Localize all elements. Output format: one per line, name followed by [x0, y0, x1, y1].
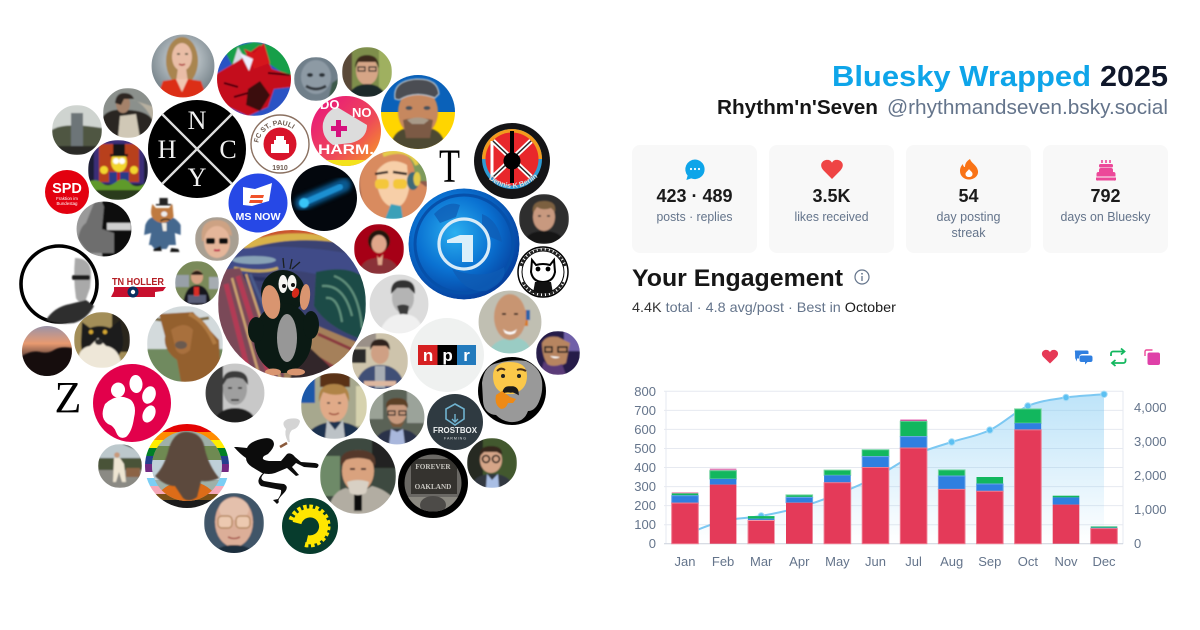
avatar: anime portrait [359, 150, 429, 219]
avatar: Frostbox farming logo: FROSTBOX [433, 426, 478, 435]
avatar: man with glasses, forest [342, 47, 392, 97]
avatar: NPR logo [410, 318, 484, 392]
month labels: Mar [750, 554, 773, 569]
profile name and handle: Rhythm'n'Seven [717, 97, 878, 119]
avatar: bearded man, black and white [369, 274, 429, 334]
avatar: green party sunflower [282, 498, 338, 554]
avatar: reporter in blazer [352, 333, 408, 391]
right axis labels [1134, 400, 1167, 551]
month labels: Jan [675, 554, 695, 569]
right axis labels: 3,000 [1134, 434, 1167, 449]
avatar: laughing man with beard [320, 438, 398, 514]
profile name and handle [717, 97, 1168, 119]
avatar: SPD logo: Fraktion im [56, 196, 78, 201]
icon: fox in a suit [144, 198, 181, 252]
avatar: MS NOW logo [228, 174, 288, 232]
icon: quotes copy squares [1145, 350, 1160, 365]
profile name and handle: @rhythmandseven.bsky.social [887, 97, 1168, 119]
text avatar: T: T [439, 140, 460, 193]
avatar: SPD logo: SPD [52, 181, 82, 197]
avatar: Forever Oakland: OAKLAND [415, 483, 451, 491]
avatar cluster [19, 34, 580, 554]
avatar: simpsons character [88, 140, 148, 200]
bar: Nov [1053, 496, 1079, 544]
card: day posting streak: day posting [936, 210, 1001, 224]
card: posts and replies: posts · replies [656, 210, 732, 224]
avatar: NYHC logo [148, 100, 246, 198]
avatar: tagesschau globe [408, 188, 520, 300]
avatar: NYHC logo: H [158, 135, 177, 164]
avatar: man with cap, Ukrainian colours [381, 75, 455, 150]
avatar: do no harm mask: NO [352, 105, 372, 120]
avatar: Dennis K Berlin [474, 123, 550, 199]
icon: info [855, 270, 869, 284]
avatar: NPR logo: p [442, 346, 453, 365]
avatar: red paw logo [93, 364, 171, 442]
avatar: NYHC logo: N [188, 106, 207, 135]
left axis labels: 800 [634, 384, 656, 399]
bar: Mar [748, 516, 774, 544]
avatar: woman with sunglasses [195, 217, 239, 261]
chart grid [664, 391, 1123, 544]
avatar: blond woman [151, 34, 215, 98]
month labels: Jul [905, 554, 922, 569]
avatar: NYHC logo: C [219, 135, 237, 164]
month labels: Feb [712, 554, 734, 569]
avatar: SPD logo: Bundestag [56, 201, 78, 206]
left axis labels: 400 [634, 460, 656, 475]
card: day posting streak: 54 [958, 186, 979, 206]
icon: replies bubbles [1075, 350, 1092, 364]
avatar: do no harm mask: DO [320, 97, 340, 112]
bar: Jul [900, 420, 927, 544]
month labels: Apr [789, 554, 810, 569]
card: days on Bluesky: days on Bluesky [1060, 210, 1151, 224]
avatar: man in TV studio [301, 373, 367, 439]
avatar: SPD logo [45, 170, 89, 214]
month labels: Oct [1018, 554, 1038, 569]
title: 2025 [1100, 61, 1168, 93]
avatar: bald man in black ring [21, 246, 97, 324]
avatar: smiling bald man [478, 290, 542, 354]
right axis labels: 0 [1134, 536, 1141, 551]
logo: TN Holler [111, 276, 166, 298]
avatar: FC St. Pauli crest [250, 114, 310, 174]
avatar: Forever Oakland [398, 448, 468, 518]
avatar: black and white hand [76, 201, 132, 257]
bar: Jan [672, 492, 698, 544]
avatar: Frostbox farming logo: FARMING [444, 436, 466, 440]
icon: likes heart [1042, 350, 1058, 364]
month labels: Dec [1092, 554, 1116, 569]
chart legend icons [1042, 348, 1160, 366]
avatar: Forever Oakland: FOREVER [415, 463, 451, 471]
avatar: NPR logo: r [463, 346, 470, 365]
avatar: do no harm mask [311, 96, 381, 166]
chart: monthly engagement [634, 384, 1167, 569]
avatar: long hair with rainbow ring [145, 424, 229, 508]
left axis labels [634, 384, 656, 551]
bar: Sep [976, 477, 1003, 544]
avatar: man, black and white [205, 363, 265, 423]
right axis labels: 1,000 [1134, 502, 1167, 517]
icon: smoking devil cat [234, 418, 319, 504]
heading: Your Engagement: Your Engagement [632, 265, 843, 292]
avatar: man in dark coat [102, 88, 154, 138]
stacked bars [672, 409, 1117, 544]
left axis labels: 700 [634, 403, 656, 418]
avatar: black and white cat [74, 312, 130, 368]
avatar: cat logo badge [518, 247, 568, 297]
card: day posting streak [906, 145, 1031, 253]
avatar: mole and The Scream [218, 224, 366, 378]
avatar: woman seated outdoors [175, 261, 219, 305]
avatar: glowing blue light [291, 165, 357, 231]
bar: Oct [1015, 409, 1041, 544]
engagement summary: 4.4K total · 4.8 avg/post · Best in October [632, 299, 896, 315]
cumulative line [685, 391, 1107, 534]
left axis labels: 300 [634, 479, 656, 494]
avatar: MS NOW logo: MS NOW [236, 211, 281, 223]
card: days on Bluesky: 792 [1090, 186, 1121, 206]
avatar: NPR logo: n [423, 346, 433, 365]
month labels: Jun [865, 554, 886, 569]
bar: Aug [938, 470, 965, 544]
month labels: Aug [940, 554, 963, 569]
bar: Jun [862, 450, 889, 544]
card: posts and replies: 423 · 489 [656, 186, 732, 206]
left axis labels: 200 [634, 498, 656, 513]
logo: TN Holler: TN HOLLER [112, 276, 164, 288]
avatar: do no harm mask: HARM. [318, 141, 374, 157]
avatar: spider-man [216, 42, 294, 116]
avatar: man on dark background [519, 194, 569, 244]
card: likes received: 3.5K [812, 186, 851, 206]
avatar: FC St. Pauli crest: 1910 [272, 165, 288, 172]
avatar: woman on red background [354, 224, 404, 274]
panel: stat cards [632, 145, 1168, 253]
right axis labels: 4,000 [1134, 400, 1167, 415]
avatar: man with glasses in suit [369, 389, 425, 445]
card: days on Bluesky [1043, 145, 1168, 253]
bar: Feb [710, 469, 736, 544]
left axis labels: 600 [634, 422, 656, 437]
avatar: FC St. Pauli crest: FC ST. PAULI [254, 120, 295, 142]
avatar: laughing man, purple [536, 331, 580, 375]
icon: reposts arrows [1111, 348, 1126, 366]
left axis labels: 500 [634, 441, 656, 456]
avatar: NYHC logo: Y [188, 163, 207, 192]
avatar: highland cow [147, 306, 223, 382]
card: posts and replies [632, 145, 757, 253]
card: likes received: likes received [794, 210, 869, 224]
cumulative area [685, 394, 1104, 544]
month labels [675, 554, 1116, 569]
avatar: gorilla statue [294, 57, 338, 101]
month labels: Sep [978, 554, 1001, 569]
avatar: bald man with glasses [204, 493, 264, 555]
avatar: berlin wall slab [52, 105, 102, 155]
bar: Apr [786, 495, 813, 544]
card: likes received [769, 145, 894, 253]
text avatar: Z: Z [55, 373, 81, 422]
avatar: Dennis K Berlin: Dennis K Berlin [489, 174, 538, 188]
right axis labels: 2,000 [1134, 468, 1167, 483]
title: Bluesky Wrapped [832, 61, 1091, 93]
month labels: May [825, 554, 850, 569]
bar: Dec [1091, 526, 1117, 544]
left axis labels: 0 [649, 536, 656, 551]
left axis labels: 100 [634, 517, 656, 532]
avatar: Frostbox farming logo [427, 394, 483, 450]
card: day posting streak: streak [952, 226, 986, 240]
avatar: thinking emoji with moustache [478, 357, 546, 425]
avatar: person seated on terrace [98, 444, 142, 488]
month labels: Nov [1054, 554, 1078, 569]
avatar: man with round glasses [467, 438, 517, 488]
bar: May [824, 470, 851, 544]
avatar: sunset [22, 326, 72, 376]
header [717, 61, 1168, 119]
